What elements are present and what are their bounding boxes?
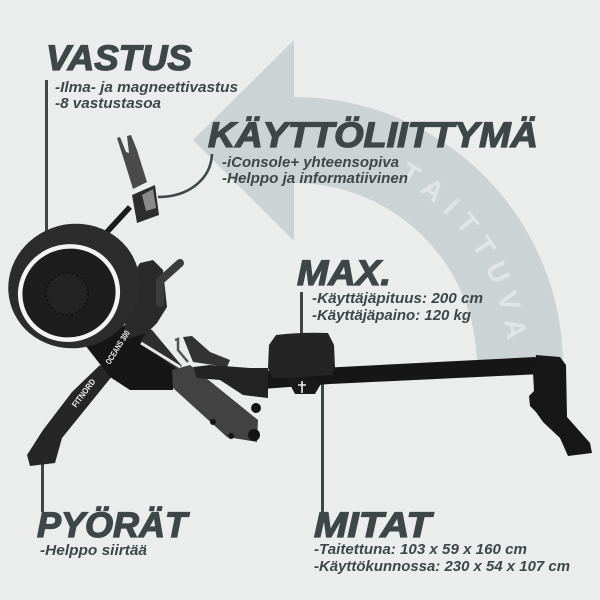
lower slide assembly <box>172 365 258 442</box>
flywheel housing <box>0 209 154 363</box>
brand mark: OCEANS 300: OCEANS 300 <box>103 328 132 366</box>
text: VASTUS details: -Ilma- ja magneettivastus <box>55 79 238 96</box>
text: VASTUS details: -8 vastustasoa <box>55 95 161 112</box>
handlebar <box>160 263 180 303</box>
text: interface details: -Helppo ja informatiivinen <box>222 170 408 187</box>
text: VASTUS details <box>55 79 238 112</box>
slide wheels <box>210 403 261 441</box>
lever post <box>175 339 188 362</box>
rear leg <box>529 355 592 456</box>
rowing machine <box>0 135 592 466</box>
text: MITAT details: -Käyttökunnossa: 230 x 54 x 107 cm <box>314 558 570 575</box>
text: interface details <box>222 154 408 187</box>
connector line: MITAT <box>321 382 324 512</box>
rail <box>262 357 542 389</box>
front leg <box>27 365 113 466</box>
console arm <box>107 207 130 232</box>
console screen <box>132 185 159 223</box>
heading: PYÖRÄT: PYÖRÄT <box>37 506 190 545</box>
screen face <box>142 189 156 211</box>
connector line: PYÖRÄT <box>41 464 44 512</box>
seat bracket mark <box>298 381 306 393</box>
connector line: VASTUS <box>45 80 48 234</box>
heading: VASTUS: VASTUS <box>46 39 192 78</box>
text: MAX details: -Käyttäjäpituus: 200 cm <box>312 290 483 307</box>
label: TAITTUVA: TAITTUVA <box>404 162 526 340</box>
dark upper body <box>141 330 182 369</box>
upper slide assembly <box>183 336 230 367</box>
centre bracket <box>193 365 268 398</box>
white strip <box>141 343 180 367</box>
connector curve: KÄYTTÖLIITTYMÄ <box>158 154 212 197</box>
text: MAX details <box>312 290 483 324</box>
drive housing <box>123 260 167 340</box>
heading: MITAT: MITAT <box>314 506 434 545</box>
seat bracket <box>285 375 322 394</box>
text: MAX details: -Käyttäjäpaino: 120 kg <box>312 307 471 324</box>
text: PYÖRÄT details: -Helppo siirtää <box>40 542 147 559</box>
brand mark: FITNORD: FITNORD <box>70 377 97 409</box>
heading: MAX.: MAX. <box>297 254 391 293</box>
text: MITAT details: -Taitettuna: 103 x 59 x 160 cm <box>314 541 527 558</box>
white flywheel ring <box>10 235 128 351</box>
text: MITAT details <box>314 541 570 575</box>
seat <box>268 333 335 378</box>
text: interface details: -iConsole+ yhteensopiva <box>222 154 399 171</box>
arrow: folding direction <box>193 40 563 361</box>
connector line: MAX <box>300 292 303 336</box>
inner flywheel disc <box>46 273 88 315</box>
lower frame <box>85 325 180 390</box>
heading: KÄYTTÖLIITTYMÄ: KÄYTTÖLIITTYMÄ <box>208 116 538 155</box>
device holder <box>117 135 147 189</box>
